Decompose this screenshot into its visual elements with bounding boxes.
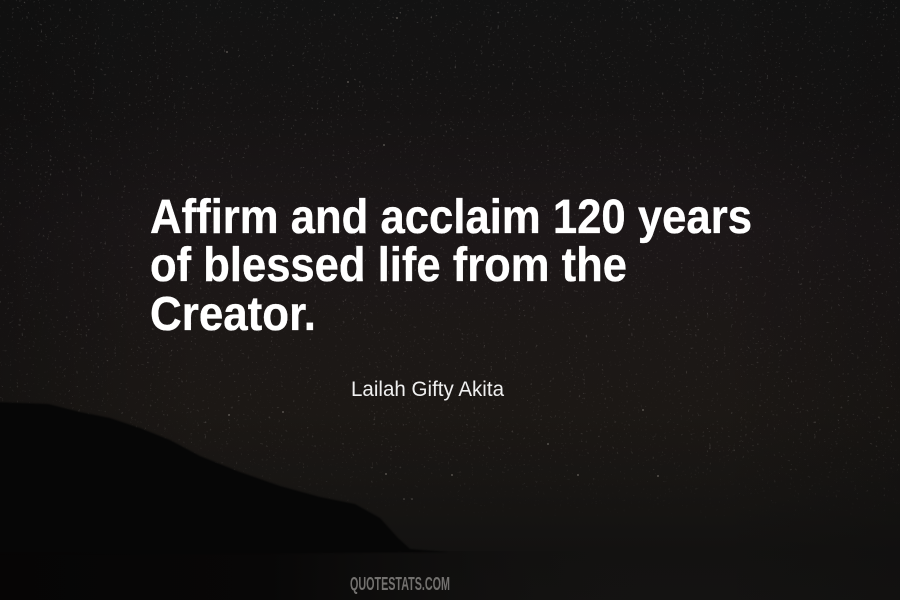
quote line 3: Creator.	[150, 288, 316, 341]
watermark: QUOTESTATS.COM	[350, 574, 450, 594]
quote text	[150, 191, 752, 341]
quote line 1: Affirm and acclaim 120 years	[150, 191, 752, 244]
quote line 2: of blessed life from the	[150, 239, 627, 292]
shoreline shadow	[0, 551, 900, 600]
hill silhouette	[0, 402, 447, 553]
bright stars	[226, 17, 659, 500]
author name: Lailah Gifty Akita	[351, 378, 504, 401]
